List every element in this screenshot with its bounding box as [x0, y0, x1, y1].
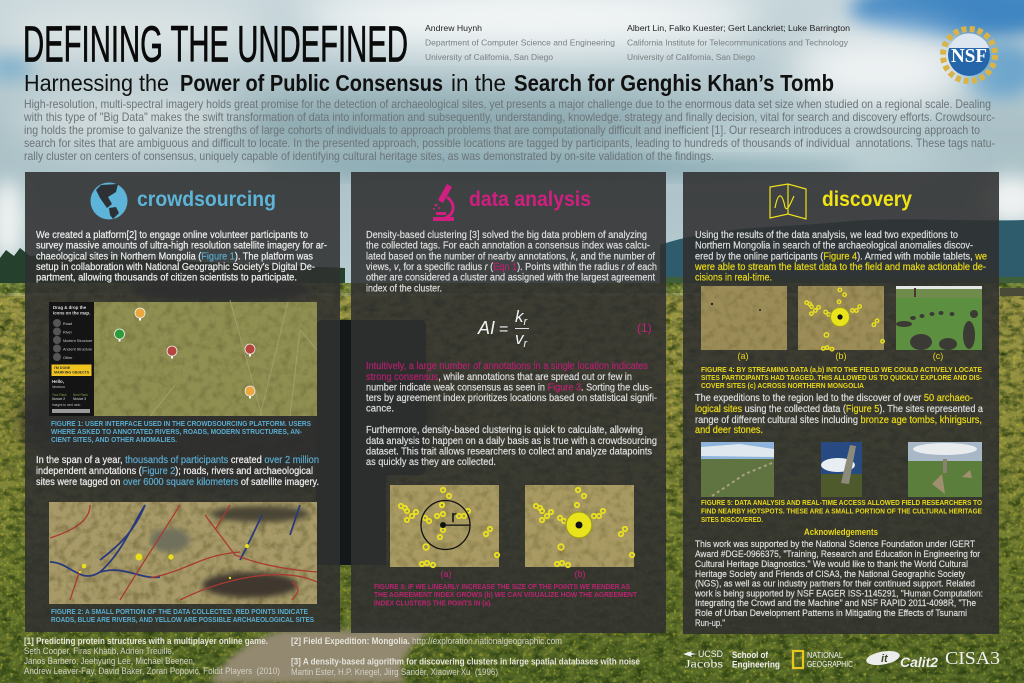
consensus text: strong consensus, while annotations that are spread out or few in — [366, 372, 632, 383]
acknowledgements text: Role of Urban Development Patterns in Mitigating the Effects of Tsunami — [695, 607, 967, 618]
figure 4a: satellite image — [701, 286, 787, 350]
reference 1: Janos Barbero, Jeehyung Lee, Michael Beenen, — [24, 655, 195, 666]
subtitle — [24, 70, 834, 96]
panel: crowdsourcing — [25, 172, 340, 632]
authors: left column: University of California, San Diego — [425, 53, 553, 62]
panel: data analysis — [351, 172, 666, 633]
icon: microscope — [433, 184, 454, 221]
figure 3a: radius clusters — [390, 485, 499, 567]
figure 1: crowdsourcing user interface: luismiura — [52, 385, 65, 389]
results text: sites were tagged on over 6000 square kilometers of satellite imagery. — [36, 477, 319, 488]
icon: map pins — [114, 308, 255, 398]
figure 1: crowdsourcing user interface: Hello, — [52, 379, 64, 384]
equation 1: = — [499, 321, 508, 338]
figure 1: crowdsourcing user interface: MARKING OBJECTS — [54, 370, 90, 374]
equation 1: v — [515, 329, 524, 348]
figure 2 caption: FIGURE 2: A SMALL PORTION OF THE DATA COLLECTED. RED POINTS INDICATE — [51, 607, 308, 616]
figure 1: crowdsourcing user interface: Ancient Structure — [63, 348, 92, 352]
figure 1: crowdsourcing user interface: Modern Structure — [63, 339, 92, 343]
speed text: Furthermore, density-based clustering is quick to calculate, allowing — [366, 425, 643, 436]
figure 1: crowdsourcing user interface: Your Rank — [52, 393, 67, 397]
findings text: range of different cultural sites including bronze age tombs, khirigsurs, — [695, 415, 982, 426]
logo: School of Engineering: Engineering — [732, 660, 780, 670]
consensus text: number indicate weak consensus as seen in Figure 3. Sorting the clus- — [366, 382, 652, 394]
figure 5 caption: FIGURE 5: DATA ANALYSIS AND REAL-TIME ACCESS ALLOWED FIELD RESEARCHERS TO — [701, 498, 982, 507]
logo: UCSD Jacobs: Jacobs — [685, 658, 724, 670]
heading: discovery: discovery — [822, 188, 912, 211]
figure 4 labels — [738, 351, 943, 361]
intro text — [36, 230, 327, 284]
figure 1: crowdsourcing user interface: Drag & drop the — [53, 305, 87, 310]
icon: NSF logo: NSF — [951, 45, 987, 67]
figure 5 left photo: bronze age tomb — [701, 442, 774, 497]
figure 1: crowdsourcing user interface: Next Rank — [73, 393, 88, 397]
logo: UCSD Jacobs: UCSD — [698, 649, 723, 660]
reference 2: [2] Field Expedition: Mongolia. http://exploration.nationalgeographic.com — [291, 635, 562, 646]
authors: right column: Albert Lin, Falko Kuester; Gert Lanckriet; Luke Barrington — [627, 24, 850, 33]
reference 3 — [291, 656, 640, 677]
figure 2 caption — [51, 607, 314, 624]
logo: School of Engineering — [732, 650, 780, 670]
method text: the collected tags. For each annotation a consensus index was calcu- — [366, 241, 650, 252]
icon: NSF logo — [943, 29, 995, 81]
consensus text: cance. — [366, 404, 394, 415]
label (b): (b) — [574, 569, 586, 579]
findings text — [695, 393, 983, 436]
results text — [36, 455, 319, 488]
heading: acknowledgements: Acknowledgements — [804, 527, 878, 538]
title: DEFINING THE UNDEFINED — [23, 16, 408, 72]
figure 4 caption: FIGURE 4: BY STREAMING DATA (a,b) INTO THE FIELD WE COULD ACTIVELY LOCATE — [701, 365, 982, 374]
figure 3 caption — [374, 582, 637, 608]
figure 3a: radius clusters: r — [451, 507, 457, 526]
logo: National Geographic: GEOGRAPHIC — [807, 659, 853, 669]
reference 1 — [24, 635, 280, 676]
figure 4c: field photo of stones — [896, 286, 982, 350]
acknowledgements text: Heritage Society and Friends of CISA3, the National Geographic Society — [695, 568, 965, 579]
equation 1: AI — [477, 318, 495, 338]
method text: Density-based clustering [3] solved the big data problem of analyzing — [366, 230, 647, 241]
figure 5 caption: SITES DISCOVERED. — [701, 515, 763, 524]
figure 1: crowdsourcing user interface: Novice 2 — [52, 397, 65, 401]
intro text: chaeological sites in Northern Mongolia (Figure 1). The platform was — [36, 251, 313, 262]
speed text: as quickly as they are collected. — [366, 457, 496, 468]
logo: Calit2: Calit2 — [900, 654, 938, 670]
figure 4 caption: SITES PARTICIPANTS HAD TAGGED. THIS ALLOWED US TO QUICKLY EXPLORE AND DIS- — [701, 373, 982, 382]
subtitle: Harnessing the — [24, 70, 169, 96]
figure 1: crowdsourcing user interface: Road — [63, 322, 72, 326]
acknowledgements text: Integrating the Crowd and the Machine" and NSF RAPID 2011-4098R, "The — [695, 597, 976, 608]
intro text: survey massive amounts of ultra-high resolution satellite imagery for ar- — [36, 241, 327, 252]
subtitle: in the — [451, 70, 506, 96]
expedition text: Northern Mongolia in search of the archaeological anomalies discov- — [695, 241, 973, 252]
figure 1 caption: FIGURE 1: USER INTERFACE USED IN THE CROWDSOURCING PLATFORM. USERS — [51, 419, 311, 428]
logo: UCSD Jacobs — [683, 649, 724, 670]
expedition text: were able to stream the latest data to the field and make actionable de- — [694, 262, 986, 273]
figure 5 caption — [701, 498, 982, 524]
equation 1: r — [524, 338, 528, 350]
authors: left column — [425, 24, 615, 62]
acknowledgements text: Award #DGE-0966375, "Training, Research and Education in Engineering for — [695, 548, 980, 559]
reference 1: [1] Predicting protein structures with a multiplayer online game. — [24, 635, 268, 646]
figure 1: crowdsourcing user interface — [49, 300, 317, 416]
figure 1: crowdsourcing user interface: River — [63, 330, 73, 334]
heading: data analysis: data analysis — [469, 188, 591, 211]
authors: right column — [627, 24, 850, 62]
logo: School of Engineering: School of — [732, 650, 769, 661]
authors: right column: California Institute for Telecommunications and Technology — [627, 38, 849, 48]
logo: Calit2 — [865, 649, 938, 670]
acknowledgements text: Run-up." — [695, 617, 725, 628]
abstract — [23, 97, 995, 163]
findings text: logical sites using the collected data (Figure 5). The sites represented a — [695, 404, 983, 415]
results text: In the span of a year, thousands of participants created over 2 million — [36, 455, 319, 466]
method text: index of the cluster. — [366, 283, 442, 294]
method text: views, v, for a specific radius r (Eqn 1). Points within the radius r of each — [366, 262, 657, 273]
figure 4b: satellite image with tags — [798, 286, 884, 351]
consensus text: Intuitively, a large number of annotations in a single location indicates — [366, 361, 648, 372]
figure 4 labels: (b) — [836, 351, 847, 361]
intro text: partment, allowing thousands of citizen scientists to participate. — [36, 273, 297, 284]
figure 3 caption: THE AGREEMENT INDEX GROWS (b) WE CAN VISUALIZE HOW THE AGREEMENT — [374, 590, 637, 599]
subtitle: Power of Public Consensus — [180, 70, 443, 96]
figure 4 caption: COVER SITES (c) ACROSS NORTHERN MONGOLIA — [701, 381, 865, 390]
authors: left column: Department of Computer Science and Engineering — [425, 38, 615, 48]
speed text: data analysis to happen on a daily basis as is true with a crowdsourcing — [366, 436, 657, 447]
figure 3b: scaled clusters — [525, 485, 634, 567]
logo: National Geographic — [793, 650, 853, 669]
figure 4 labels: (a) — [738, 351, 749, 361]
logo: CISA3: CISA3 — [945, 648, 1000, 668]
expedition text — [694, 230, 987, 284]
reference 1: Seth Cooper, Firas Khatib, Adrien Treuille, — [24, 645, 174, 656]
reference 1: Andrew Leaver-Fay, David Baker, Zoran Popović, Foldit Players (2010) — [24, 665, 280, 676]
figure 2 caption: ROADS, BLUE ARE RIVERS, AND YELLOW ARE POSSIBLE ARCHAEOLOGICAL SITES — [51, 615, 314, 624]
equation 1 — [477, 307, 529, 350]
acknowledgements text: work is being supported by NSF EAGER ISS-1145291, "Human Computation: — [694, 588, 983, 598]
intro text: setup in collaboration with National Geographic Society's Digital De- — [36, 262, 315, 273]
acknowledgements text: Cultural Heritage Diagnostics." We would like to thank the World Cultural — [695, 558, 968, 569]
equation number: (1) — [637, 321, 652, 335]
figure 3 caption: INDEX CLUSTERS THE POINTS IN (a). — [374, 598, 492, 608]
reference 3: [3] A density-based algorithm for discovering clusters in large spatial databases with noise — [291, 656, 640, 666]
findings text: and deer stones. — [695, 425, 763, 436]
equation 1: r — [524, 316, 528, 328]
acknowledgements text: (NGS), as well as our industry partners for their continued support. Related — [695, 578, 975, 588]
figure 4 labels: (c) — [933, 351, 943, 361]
panel: discovery — [683, 172, 999, 634]
expedition text: Using the results of the data analysis, we lead two expeditions to — [695, 230, 958, 241]
icon: globe — [90, 182, 128, 220]
speed text: dataset. This trait allows researchers to collect and analyze datapoints — [366, 446, 652, 458]
figure 5 centre photo: deer stone — [821, 442, 862, 497]
figure 5 caption: FIND NEARBY HOTSPOTS. THESE ARE A SMALL PORTION OF THE CULTURAL HERITAGE — [701, 506, 982, 516]
equation 1: k — [515, 307, 524, 326]
heading: crowdsourcing: crowdsourcing — [137, 188, 276, 211]
consensus text: ters by agreement index prioritizes locations based on statistical signifi- — [366, 393, 657, 404]
consensus text — [366, 361, 657, 415]
logo: Calit2: it — [881, 653, 889, 665]
method text: lated based on the number of nearby annotations, k, and the number of — [366, 251, 655, 262]
acknowledgements text — [694, 538, 983, 628]
authors: left column: Andrew Huynh — [425, 24, 482, 33]
figure 1 caption — [51, 419, 311, 444]
figure 1: crowdsourcing user interface: Images to next rank: — [52, 403, 81, 407]
figure 5 right photo: deer stones — [908, 442, 982, 497]
results text: independent annotations (Figure 2); roads, rivers and archaeological — [36, 466, 313, 477]
expedition text: ered by the online participants (Figure 4). Armed with mobile tablets, we — [695, 251, 987, 262]
figure 1: crowdsourcing user interface: Other — [63, 356, 73, 360]
figure 3 caption: FIGURE 3: IF WE LINEARLY INCREASE THE SIZE OF THE POINTS WE RENDER AS — [374, 582, 630, 591]
figure 4 caption — [701, 365, 982, 390]
figure 1: crowdsourcing user interface: icons on the map. — [53, 310, 90, 316]
label (a): (a) — [440, 569, 452, 579]
logo: National Geographic: NATIONAL — [807, 650, 843, 660]
abstract: rally cluster on centers of consensus, uniquely capable of identifying cultural heritage sites, as was demonstrated by on-site validation of the findings. — [24, 149, 714, 163]
subtitle: Search for Genghis Khan’s Tomb — [514, 70, 834, 96]
figure 1 caption: WHERE ASKED TO ANNOTATED RIVERS, ROADS, MODERN STRUCTURES, AN- — [51, 427, 302, 436]
figure 1 caption: CIENT SITES, AND OTHER ANOMALIES. — [51, 435, 177, 444]
figure 1: crowdsourcing user interface: I'M DONE — [54, 366, 71, 370]
speed text — [366, 425, 657, 468]
reference 3: Martin Ester, H.P. Kriegel, Jiirg Sander, Xiaowei Xu (1996) — [291, 666, 498, 677]
authors: right column: University of California, San Diego — [627, 53, 755, 62]
acknowledgements text: This work was supported by the National Science Foundation under IGERT — [695, 538, 975, 549]
expedition text: cisions in real-time. — [695, 273, 772, 284]
intro text: We created a platform[2] to engage online volunteer participants to — [36, 230, 308, 241]
method text: other are considered a cluster and assigned with the largest agreement — [366, 273, 655, 284]
findings text: The expeditions to the region led to the discover of over 50 archaeo- — [695, 393, 973, 404]
figure 1: crowdsourcing user interface: Novice 3 — [73, 397, 86, 401]
figure 2: annotated map — [49, 502, 317, 604]
method text — [366, 230, 657, 294]
icon: map — [770, 184, 806, 219]
